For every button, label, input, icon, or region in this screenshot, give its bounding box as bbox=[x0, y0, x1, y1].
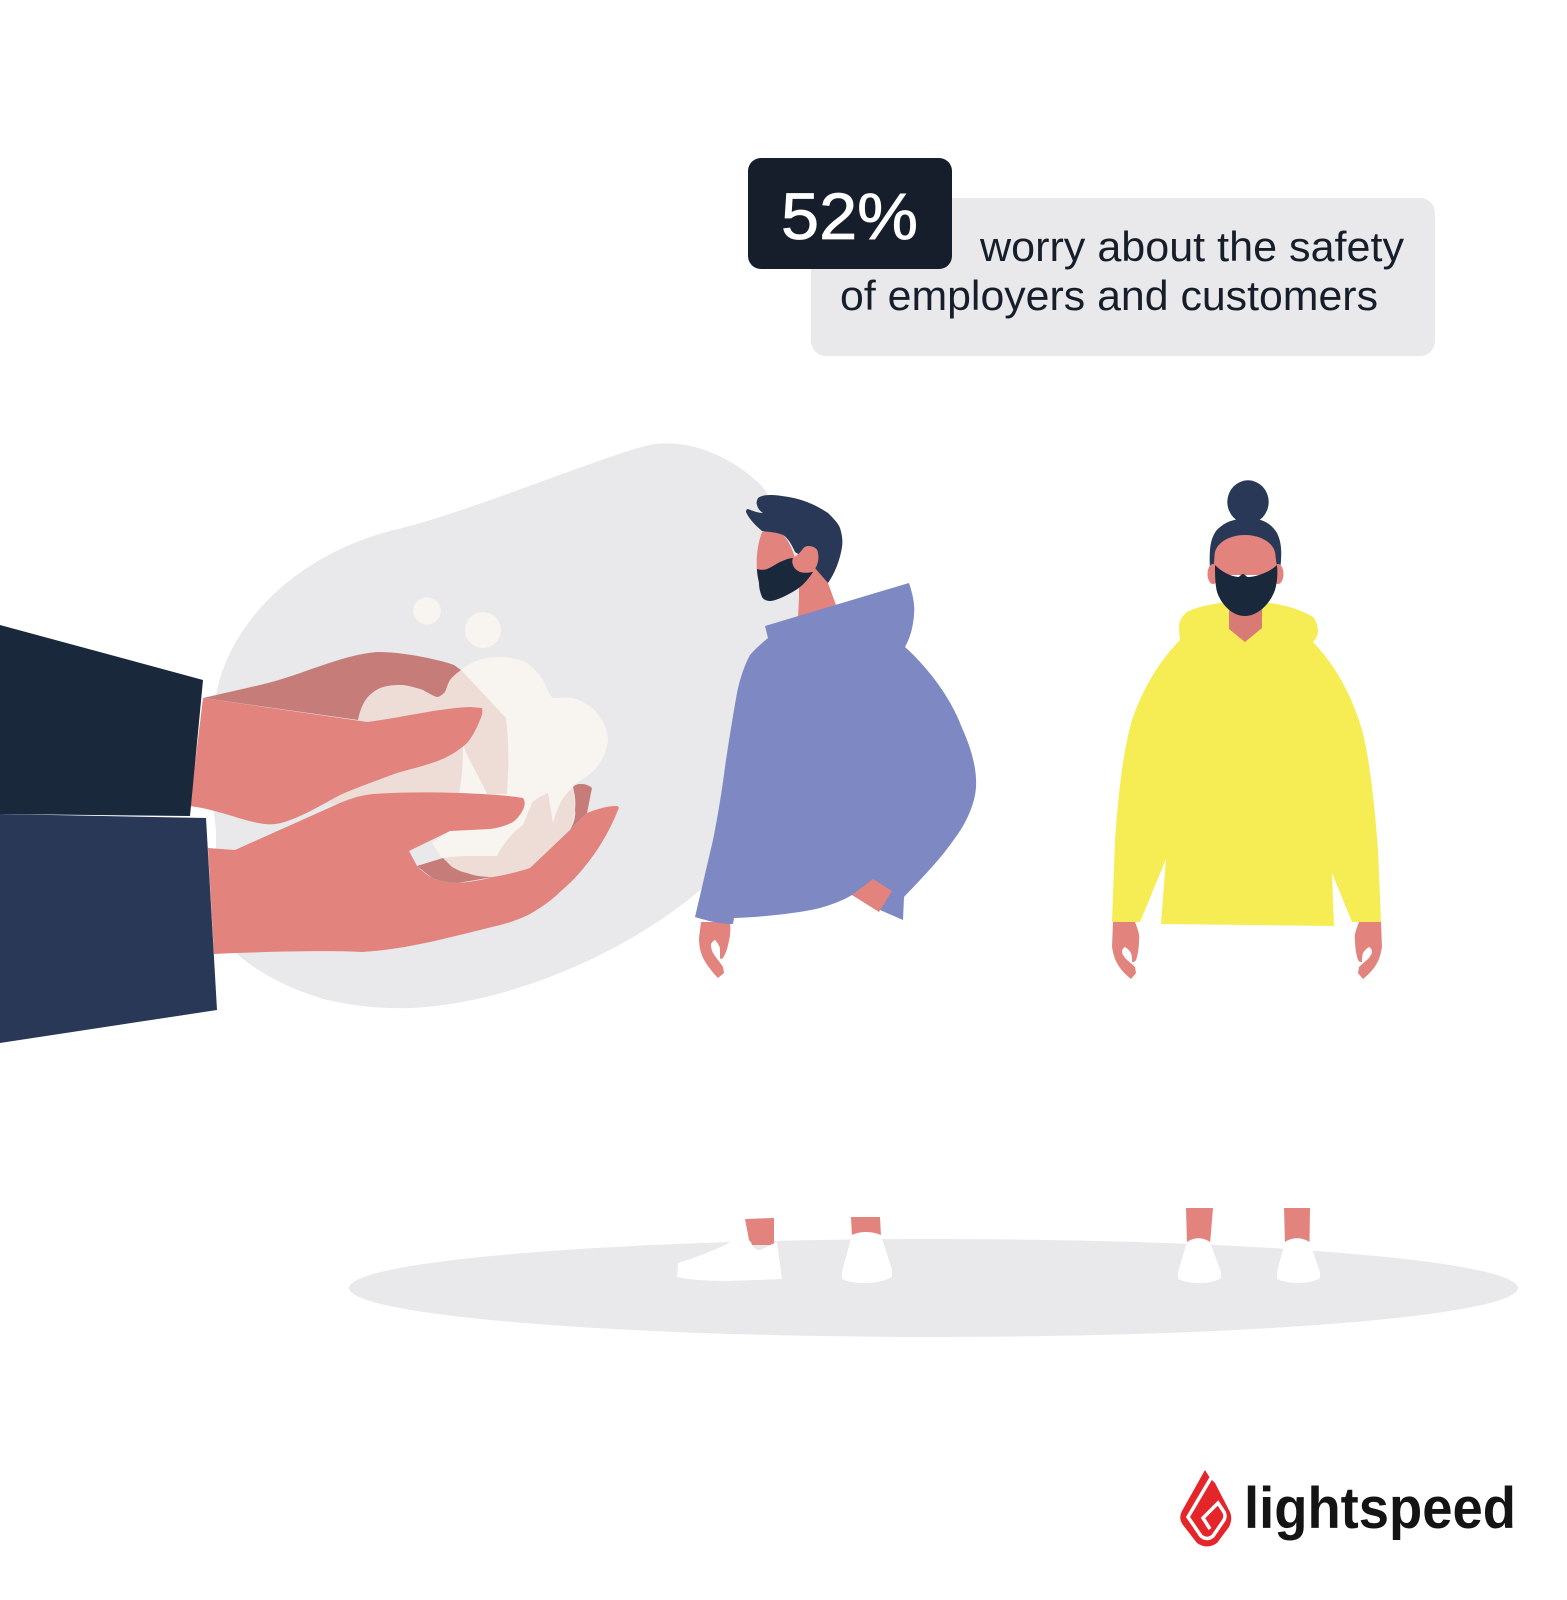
52% badge: 52% bbox=[781, 179, 918, 253]
face bbox=[1213, 535, 1278, 575]
soap bubbles bbox=[413, 598, 501, 648]
neck bbox=[798, 562, 836, 618]
hoodie bbox=[695, 583, 976, 924]
hair bbox=[1210, 519, 1281, 570]
foam tint in lower palm bbox=[442, 788, 575, 877]
mask bbox=[757, 558, 813, 601]
face bbox=[757, 531, 800, 578]
callout text panel bbox=[811, 198, 1435, 356]
hair bbox=[746, 495, 842, 583]
hoodie bbox=[1112, 603, 1381, 926]
shadow under foam bbox=[417, 858, 493, 883]
upper hand bbox=[190, 698, 482, 824]
legs bbox=[745, 1217, 881, 1245]
logo: lightspeed bbox=[1180, 1470, 1516, 1546]
52% badge bbox=[748, 158, 952, 269]
logo wordmark: lightspeed bbox=[1244, 1476, 1516, 1541]
shadow of back fingers bbox=[570, 784, 592, 830]
lower sleeve bbox=[0, 814, 217, 1043]
legs bbox=[1186, 1208, 1310, 1244]
ear bbox=[792, 546, 818, 573]
shoes bbox=[1178, 1238, 1320, 1283]
foam seen through upper hand bbox=[330, 670, 508, 806]
character: person with bun in yellow hoodie bbox=[1112, 480, 1382, 1283]
callout description: of employers and customers bbox=[840, 272, 1378, 319]
illustration: hands washing with soap bbox=[0, 598, 619, 1043]
logo icon bbox=[1180, 1470, 1231, 1546]
mask bbox=[1215, 565, 1277, 616]
character: man in purple hoodie bbox=[677, 495, 976, 1283]
forearm bbox=[852, 879, 892, 912]
callout: statistic bbox=[748, 158, 1435, 356]
lower hand bbox=[208, 792, 619, 954]
shoes bbox=[677, 1232, 892, 1283]
hands bbox=[1112, 922, 1382, 979]
left hand bbox=[699, 922, 730, 978]
upper sleeve bbox=[0, 625, 203, 816]
soap foam bbox=[340, 657, 608, 877]
shadow of back hand bbox=[203, 652, 461, 720]
ears bbox=[1208, 564, 1284, 584]
neck bbox=[1229, 605, 1262, 642]
callout description: worry about the safety bbox=[979, 223, 1404, 270]
hair bun bbox=[1227, 480, 1269, 524]
background blob bbox=[211, 443, 799, 1008]
ground shadow bbox=[349, 1239, 1518, 1337]
